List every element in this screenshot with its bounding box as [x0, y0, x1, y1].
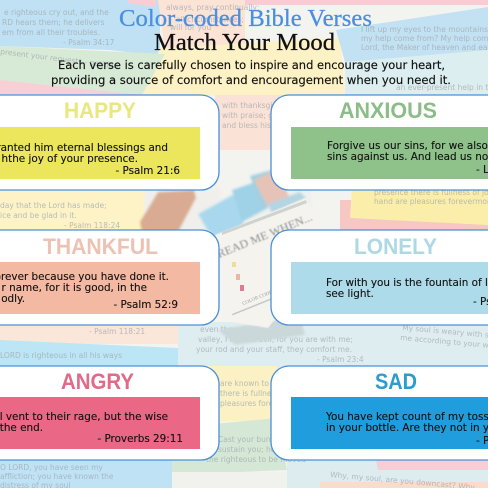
- angry verse box: - Proverbs 29:11: [97, 433, 183, 445]
- happy verse box: ranted him eternal blessings and: [0, 142, 168, 154]
- faded background verses: - Psalm 118:24: [64, 221, 120, 230]
- faded background verses: always, pray continually;: [166, 3, 260, 12]
- title: Match Your Mood: Match Your Mood: [154, 30, 335, 56]
- anxious verse box: [291, 127, 488, 179]
- thankful verse box: odly.: [1, 293, 25, 305]
- icon: glass jar with cork: READ ME WHEN...: [215, 210, 314, 261]
- sad verse box: [291, 397, 488, 449]
- faded background verses: day that the Lord has made;: [0, 201, 107, 210]
- faded background verses: with thanksgiving: [222, 101, 289, 110]
- faded background verses: there is fullness: [220, 389, 279, 398]
- faded background verses: valley, I fear no evil, for you are with me;: [198, 335, 353, 344]
- faded background verses: are known to me: [220, 379, 284, 388]
- thankful verse box: r name, for it is good, in the: [2, 282, 147, 294]
- panel: angry: [0, 366, 219, 460]
- faded background verses: pleasures forever: [220, 399, 286, 408]
- lonely verse box: [291, 262, 488, 314]
- intro text: [51, 58, 451, 87]
- lonely heading: LONELY: [354, 234, 437, 259]
- lonely verse box: see light.: [326, 288, 374, 300]
- panel: lonely: [271, 230, 488, 325]
- faded background verses: Cast your burden: [218, 435, 283, 444]
- faded background verses: and bless his name: [222, 121, 295, 130]
- faded background verses: ice and be glad in it.: [0, 211, 77, 220]
- faded background verses: O LORD, you have seen my: [0, 463, 103, 472]
- sad heading: SAD: [375, 369, 417, 394]
- faded background verses: present your requests - petition: [0, 47, 119, 70]
- faded background verses: RD hears them; he delivers: [2, 18, 105, 27]
- happy heading: HAPPY: [64, 98, 136, 123]
- faded background verses: - Psalm 34:17: [63, 38, 115, 47]
- happy verse box: hthe joy of your presence.: [2, 153, 138, 165]
- faded background verses: even though: [200, 325, 248, 334]
- angry heading: ANGRY: [61, 369, 134, 394]
- thankful verse box: [0, 262, 200, 314]
- faded background verses: e righteous cry out, and the: [4, 8, 109, 17]
- faded background verses: with praise; give: [222, 111, 285, 120]
- faded background verses: will for you: [170, 23, 211, 32]
- faded background verses: LORD is righteous in all his ways: [0, 351, 122, 360]
- faded background verses: your rod and your staff, they comfort me.: [196, 345, 352, 354]
- intro text: providing a source of comfort and encouragement when you need it.: [51, 73, 451, 87]
- angry verse box: [0, 397, 200, 449]
- faded background verses: affliction; you have known the: [0, 472, 114, 481]
- thankful heading: THANKFUL: [43, 234, 158, 259]
- angry verse box: l vent to their rage, but the wise: [0, 411, 168, 423]
- icon: glass jar with cork: [140, 170, 322, 345]
- happy verse box: [0, 127, 200, 179]
- faded background verses: - Psalm 118:21: [89, 327, 145, 336]
- panel: anxious: [271, 95, 488, 190]
- faded background verses: sustain you; he: [218, 445, 276, 454]
- intro text: Each verse is carefully chosen to inspire and encourage your heart,: [58, 58, 445, 72]
- happy verse box: - Psalm 21:6: [115, 165, 180, 177]
- faded background verses: the righteous to be moved: [206, 455, 306, 464]
- panel: happy: [0, 95, 219, 190]
- angry verse box: the end.: [0, 422, 43, 434]
- title: Color-coded Bible Verses: Color-coded Bible Verses: [119, 6, 372, 32]
- panel: thankful: [0, 230, 219, 325]
- faded background verses: - Psalm 23:4: [317, 355, 364, 364]
- thankful verse box: - Psalm 52:9: [113, 299, 178, 311]
- faded background verses: em from all their troubles.: [2, 28, 100, 37]
- panel: sad: [271, 366, 488, 460]
- icon: glass jar with cork: COLOR CODED: [242, 289, 277, 307]
- anxious heading: ANXIOUS: [339, 98, 437, 123]
- faded background verses: all circumstances;: [176, 15, 244, 24]
